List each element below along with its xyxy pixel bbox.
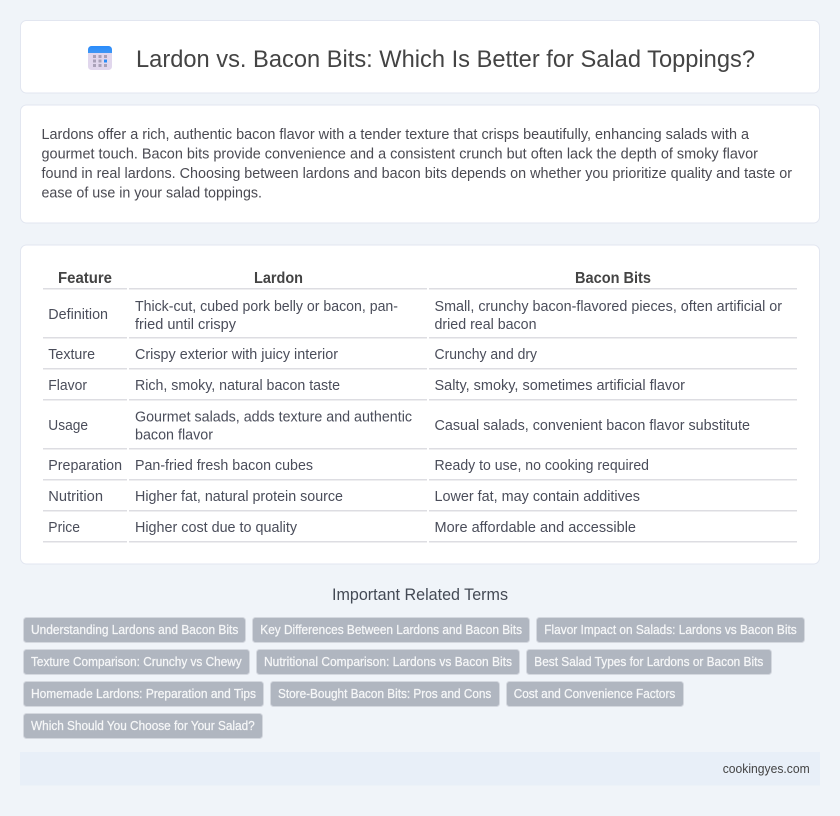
icon: calendar <box>88 46 112 70</box>
table header row: Bacon Bits <box>575 270 651 287</box>
tag: store-bought <box>270 682 500 706</box>
tag: texture comparison: Texture Comparison: Crunchy vs Chewy <box>31 655 242 669</box>
row: usage: Gourmet salads, adds texture and authentic <box>135 410 412 426</box>
row: texture: Crispy exterior with juicy interior <box>135 347 338 363</box>
tag: cost and convenience: Cost and Convenience Factors <box>514 687 675 701</box>
row: usage: Usage <box>48 418 88 434</box>
row: nutrition: Higher fat, natural protein source <box>135 489 343 505</box>
tag: homemade lardons: Homemade Lardons: Preparation and Tips <box>31 687 256 701</box>
footer source: cookingyes.com <box>723 762 810 776</box>
tag: best salad types: Best Salad Types for Lardons or Bacon Bits <box>534 655 763 669</box>
row: texture: Crunchy and dry <box>434 347 538 363</box>
tag: cost and convenience <box>506 682 684 706</box>
tag: homemade lardons <box>24 682 264 706</box>
row: definition: Thick-cut, cubed pork belly or bacon, pan- <box>135 299 398 315</box>
intro text: gourmet touch. Bacon bits provide convenience and a consistent crunch but often lack the depth of smoky flavor <box>42 146 758 162</box>
related term tags <box>24 618 804 738</box>
tag: understanding <box>24 618 246 642</box>
tag: best salad types <box>526 650 772 674</box>
intro text <box>42 127 792 202</box>
row: definition: fried until crispy <box>135 317 237 333</box>
row: usage: bacon flavor <box>135 428 213 444</box>
row: price: Higher cost due to quality <box>135 520 298 536</box>
tag: understanding: Understanding Lardons and Bacon Bits <box>31 623 238 637</box>
row: price: Price <box>48 520 80 536</box>
row: flavor: Rich, smoky, natural bacon taste <box>135 378 340 394</box>
intro text: ease of use in your salad toppings. <box>42 186 262 202</box>
tag: texture comparison <box>24 650 250 674</box>
intro text: Lardons offer a rich, authentic bacon flavor with a tender texture that crisps beautifully, enhancing salads with a <box>42 127 750 143</box>
row: nutrition: Lower fat, may contain additives <box>434 489 640 505</box>
row: definition: dried real bacon <box>434 317 536 333</box>
tag: flavor impact: Flavor Impact on Salads: Lardons vs Bacon Bits <box>544 623 797 637</box>
footer <box>20 752 820 786</box>
row: usage: Casual salads, convenient bacon flavor substitute <box>434 418 750 434</box>
tag: which to choose: Which Should You Choose for Your Salad? <box>31 719 255 733</box>
panel: header <box>20 20 820 93</box>
row: definition: Small, crunchy bacon-flavored pieces, often artificial or <box>434 299 782 315</box>
row: nutrition: Nutrition <box>48 489 103 505</box>
panel: introduction <box>20 105 820 223</box>
row: preparation: Ready to use, no cooking required <box>434 458 649 474</box>
panel: comparison table <box>20 245 820 564</box>
row: definition: Definition <box>48 307 108 323</box>
row: usage <box>43 410 797 450</box>
heading: important related terms: Important Related Terms <box>332 586 508 604</box>
table header row: Feature <box>58 270 112 287</box>
tag: nutritional comparison: Nutritional Comparison: Lardons vs Bacon Bits <box>264 655 512 669</box>
intro text: found in real lardons. Choosing between lardons and bacon bits depends on whether you prioritize quality and taste or <box>42 166 792 182</box>
tag: nutritional comparison <box>256 650 520 674</box>
row: preparation: Pan-fried fresh bacon cubes <box>135 458 313 474</box>
tag: store-bought: Store-Bought Bacon Bits: Pros and Cons <box>278 687 491 701</box>
row: price <box>43 520 797 542</box>
title: Lardon vs. Bacon Bits: Which Is Better for Salad Toppings? <box>136 46 755 73</box>
table header row <box>43 270 797 290</box>
row: texture <box>43 347 797 370</box>
row: price: More affordable and accessible <box>434 520 636 536</box>
tag: key differences: Key Differences Between Lardons and Bacon Bits <box>260 623 522 637</box>
row: definition <box>43 299 797 338</box>
row: nutrition <box>43 489 797 512</box>
tag: which to choose <box>24 714 262 738</box>
tag: flavor impact <box>536 618 804 642</box>
row: preparation: Preparation <box>48 458 122 474</box>
row: flavor: Salty, smoky, sometimes artificial flavor <box>434 378 685 394</box>
row: flavor: Flavor <box>48 378 87 394</box>
row: preparation <box>43 458 797 480</box>
row: flavor <box>43 378 797 400</box>
table header row: Lardon <box>254 270 303 287</box>
row: texture: Texture <box>48 347 95 363</box>
tag: key differences <box>252 618 530 642</box>
